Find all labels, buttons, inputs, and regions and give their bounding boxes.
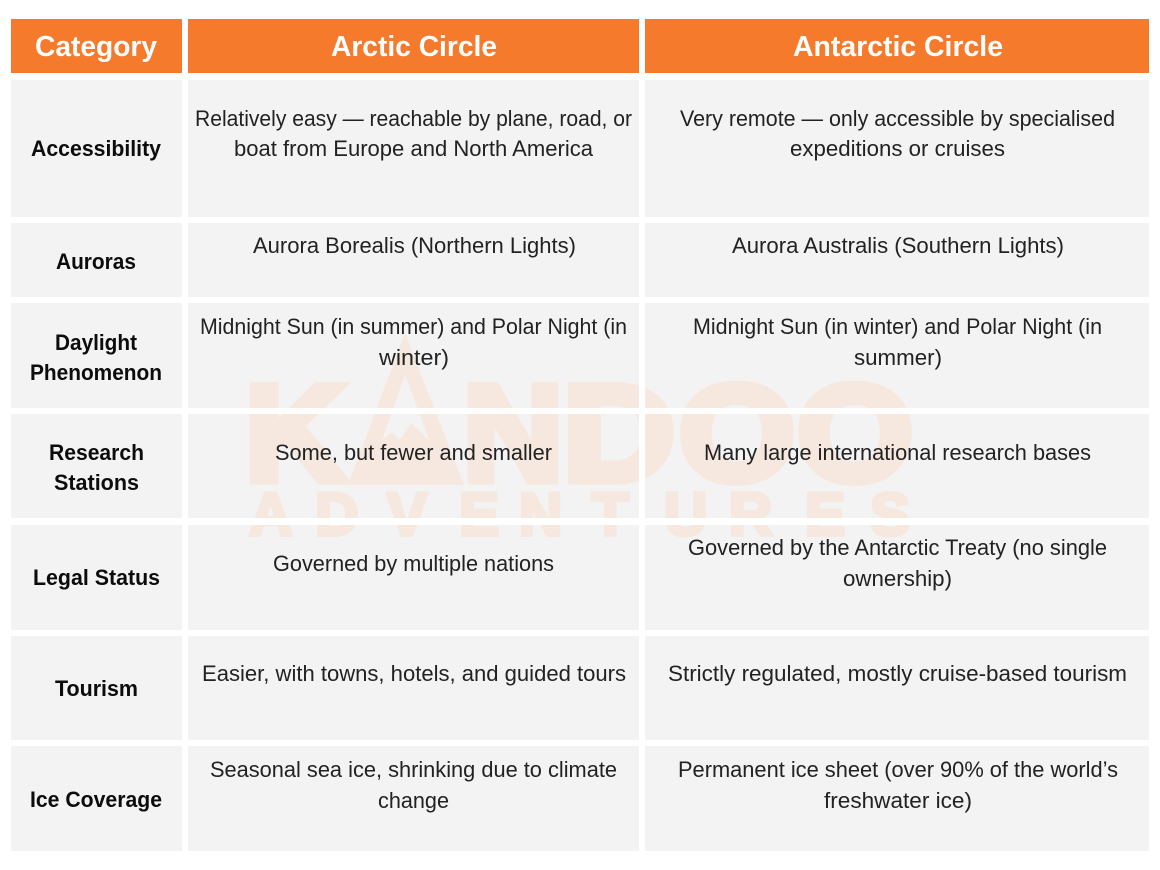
icon: mountain letter A (348, 333, 464, 485)
header: Category: Category (35, 31, 157, 63)
row: Legal Status: Legal Status (33, 565, 160, 590)
watermark: Kandoo Adventures logo (245, 333, 913, 548)
header: Arctic Circle: Arctic Circle (331, 31, 497, 63)
row: Accessibility: expeditions or cruises (790, 136, 1005, 161)
row: Research Stations: Stations (54, 470, 139, 495)
row: Legal Status (33, 535, 1107, 591)
row: Ice Coverage: Ice Coverage (30, 787, 162, 812)
watermark: Kandoo Adventures logo: N (463, 357, 563, 509)
watermark: Kandoo Adventures logo: D (563, 357, 675, 509)
header: Antarctic Circle (645, 19, 1149, 73)
row: Auroras: Aurora Borealis (Northern Lights) (253, 233, 576, 258)
row: Legal Status: Governed by multiple nations (273, 551, 554, 576)
header: Category (11, 19, 182, 73)
row: Legal Status: Governed by the Antarctic Treaty (no single (688, 535, 1107, 560)
row: Daylight Phenomenon: Daylight (55, 330, 138, 355)
watermark: Kandoo Adventures logo: O (797, 357, 913, 509)
row: Daylight Phenomenon: Midnight Sun (in summer) and Polar Night (in (200, 314, 627, 339)
watermark: Kandoo Adventures logo: ADVENTURES (249, 481, 910, 548)
row: Tourism: Tourism (55, 676, 138, 701)
row: Ice Coverage: Seasonal sea ice, shrinking due to climate (210, 757, 617, 782)
row: Accessibility (31, 106, 1115, 161)
row: Research Stations: Some, but fewer and smaller (275, 440, 552, 465)
row: Accessibility: Accessibility (31, 136, 162, 161)
row: Ice Coverage (30, 757, 1118, 813)
row: Research Stations (49, 440, 1091, 495)
row: Legal Status: ownership) (843, 566, 952, 591)
row: Auroras: Aurora Australis (Southern Lights) (732, 233, 1064, 258)
header row (11, 19, 1149, 73)
row: Daylight Phenomenon: summer) (854, 345, 942, 370)
row: Auroras: Auroras (56, 249, 136, 274)
row: Research Stations: Many large international research bases (704, 440, 1091, 465)
row: Auroras (56, 233, 1064, 274)
row: Ice Coverage: freshwater ice) (824, 788, 972, 813)
row: Ice Coverage: Permanent ice sheet (over 90% of the world’s (678, 757, 1118, 782)
row: Accessibility: Very remote — only accessible by specialised (680, 106, 1115, 131)
row: Daylight Phenomenon: Midnight Sun (in winter) and Polar Night (in (693, 314, 1102, 339)
watermark: Kandoo Adventures logo: O (679, 357, 795, 509)
row: Tourism: Easier, with towns, hotels, and guided tours (202, 661, 626, 686)
row: Daylight Phenomenon: winter) (378, 345, 449, 370)
header: Antarctic Circle: Antarctic Circle (793, 31, 1003, 63)
row: Research Stations: Research (49, 440, 144, 465)
row: Ice Coverage: change (378, 788, 449, 813)
watermark: Kandoo Adventures logo: K (245, 357, 345, 509)
row: Accessibility: Relatively easy — reachable by plane, road, or (195, 106, 632, 131)
header: Arctic Circle (188, 19, 639, 73)
row: Tourism (55, 661, 1127, 701)
row: Accessibility: boat from Europe and North America (234, 136, 594, 161)
row: Daylight Phenomenon: Phenomenon (30, 360, 162, 385)
row: Tourism: Strictly regulated, mostly cruise-based tourism (668, 661, 1127, 686)
row: Daylight Phenomenon (30, 314, 1102, 385)
